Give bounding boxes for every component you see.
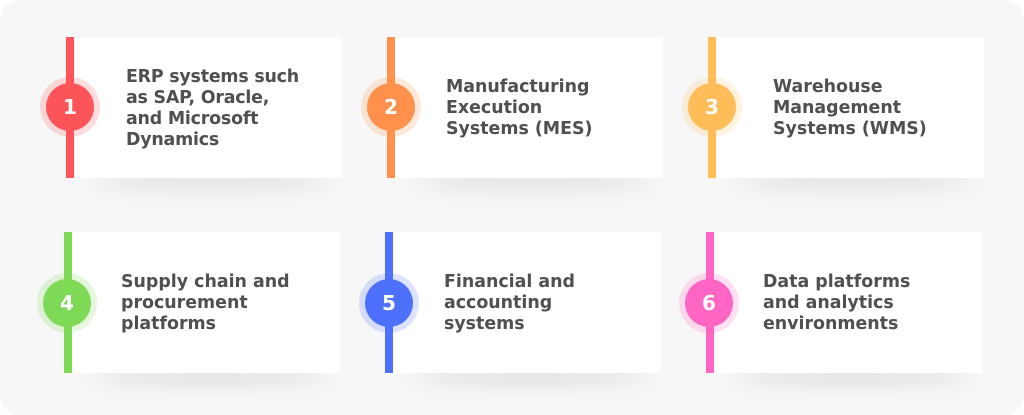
- text: ERP systems: and Microsoft: [126, 109, 258, 129]
- text: WMS: Systems (WMS): [773, 119, 927, 139]
- text: financial: [444, 272, 575, 334]
- panel: item 4 supply chain: [37, 232, 309, 388]
- panel: item 3 WMS: [682, 37, 953, 193]
- number 3: [688, 83, 736, 131]
- text: ERP systems: ERP systems such: [126, 66, 299, 86]
- text: MES: Execution: [446, 98, 542, 118]
- text: ERP systems: Dynamics: [126, 130, 219, 150]
- number 6: [685, 279, 733, 327]
- text: ERP systems: [126, 66, 299, 150]
- text: financial: Financial and: [444, 272, 575, 292]
- number 1: [46, 83, 94, 131]
- text: data platforms: Data platforms: [763, 272, 910, 292]
- text: WMS: Warehouse: [773, 76, 883, 96]
- number 4: [43, 279, 91, 327]
- number 2: [367, 83, 415, 131]
- text: financial: systems: [444, 314, 525, 334]
- text: MES: Manufacturing: [446, 76, 589, 96]
- panel: item 1 ERP systems: [40, 37, 311, 193]
- panel: item 2 MES: [361, 37, 632, 193]
- number 1: 1: [63, 95, 77, 119]
- number 2: 2: [384, 95, 398, 119]
- number 6: 6: [702, 291, 716, 315]
- text: supply chain: Supply chain and: [121, 272, 290, 292]
- number 5: [365, 279, 413, 327]
- text: data platforms: and analytics: [763, 293, 894, 313]
- text: supply chain: procurement: [121, 293, 248, 313]
- number 5: 5: [382, 291, 396, 315]
- text: WMS: Management: [773, 98, 901, 118]
- number 3: 3: [705, 95, 719, 119]
- text: ERP systems: as SAP, Oracle,: [126, 88, 269, 108]
- text: data platforms: environments: [763, 314, 898, 334]
- text: financial: accounting: [444, 293, 552, 313]
- text: data platforms: [763, 272, 910, 334]
- panel: item 5 financial: [359, 232, 630, 388]
- number 4: 4: [60, 291, 74, 315]
- panel: item 6 data platforms: [679, 232, 951, 388]
- text: supply chain: platforms: [121, 314, 216, 334]
- text: WMS: [773, 76, 927, 139]
- text: supply chain: [121, 272, 290, 334]
- text: MES: Systems (MES): [446, 119, 592, 139]
- text: MES: [446, 76, 592, 139]
